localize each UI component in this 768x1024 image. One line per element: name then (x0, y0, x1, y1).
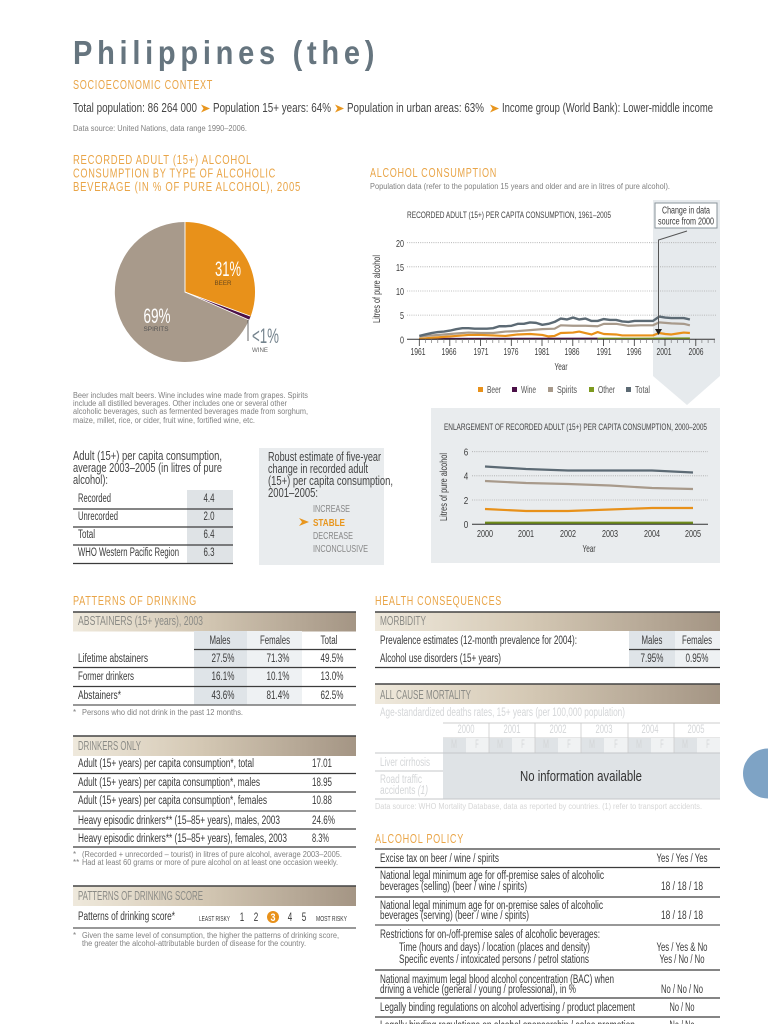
panel: abstainers table: 81.4% (266, 690, 290, 702)
per capita consumption intro (73, 449, 222, 487)
heading: recorded consumption by beverage: BEVERAGE (IN % OF PURE ALCOHOL), 2005 (73, 179, 301, 194)
panel: abstainers table: 13.0% (320, 671, 344, 683)
chart legend: Beer (487, 384, 501, 396)
pie chart (115, 222, 279, 362)
drinkers only footnotes: ** (73, 858, 79, 867)
drinkers only footnotes: Had at least 60 grams or more of pure alcohol on at least one occasion weekly. (82, 858, 338, 867)
panel: abstainers table: 43.6% (212, 690, 234, 702)
panel: drinkers only table: 24.6% (312, 815, 335, 827)
panel: all cause mortality: 2003 (596, 724, 612, 736)
panel: abstainers table: Males (210, 635, 231, 647)
panel: alcohol policy table: 18 / 18 / 18 (661, 881, 703, 893)
panel: enlargement chart 2000-2005: 2004 (644, 528, 660, 540)
panel: enlargement chart 2000-2005: 2 (464, 495, 468, 507)
heading: recorded consumption by beverage: CONSUMPTION BY TYPE OF ALCOHOLIC (73, 166, 276, 180)
beverage definitions note: alcoholic beverages, such as fermented beverages made from sorghum, (73, 407, 308, 416)
panel: abstainers table: 27.5% (212, 653, 234, 665)
line chart: consumption 1961-2005: Litres of pure alcohol (372, 255, 383, 323)
panel: abstainers table: ABSTAINERS (15+ years), 2003 (78, 614, 203, 628)
score footnote (73, 931, 339, 948)
per capita consumption table: Total (78, 529, 95, 541)
line chart: consumption 1961-2005: 1981 (534, 346, 550, 358)
socioeconomic indicators line: Total population: 86 264 000 (73, 101, 197, 115)
panel: alcohol policy table: Yes / No / No (660, 954, 704, 966)
panel: alcohol policy table (375, 849, 720, 1024)
panel: all cause mortality: F (521, 739, 525, 751)
panel: patterns of drinking score: Patterns of drinking score* (78, 911, 175, 923)
chart legend: Other (598, 384, 615, 396)
panel: alcohol policy table: Yes / Yes / Yes (656, 853, 708, 865)
panel: patterns of drinking score: PATTERNS OF DRINKING SCORE (78, 889, 203, 903)
panel: all cause mortality: 2000 (458, 724, 474, 736)
pie chart: 31% (215, 258, 241, 281)
per capita consumption table: 6.3 (204, 547, 214, 559)
per capita consumption table: 4.4 (204, 493, 215, 505)
panel: all cause mortality: 2004 (642, 724, 659, 736)
line chart: consumption 1961-2005: 1966 (442, 346, 457, 358)
panel: abstainers table (73, 612, 356, 705)
panel: alcohol policy table: National maximum legal blood alcohol concentration (BAC) when (380, 974, 614, 986)
panel: drinkers only table: Adult (15+ years) per capita consumption*, total (78, 758, 254, 770)
beverage definitions note: maize, millet, rice, or cider, fruit wine, fortified wine, etc. (73, 416, 255, 425)
panel: alcohol policy table: Specific events / intoxicated persons / petrol stations (399, 954, 589, 966)
panel: five-year change estimate: (15+) per capita consumption, (268, 474, 393, 488)
panel: drinkers only table: Adult (15+ years) per capita consumption*, males (78, 777, 260, 789)
per capita consumption table (73, 490, 233, 564)
panel: five-year change estimate: INCREASE (313, 503, 350, 515)
panel: patterns of drinking score: LEAST RISKY (199, 914, 230, 923)
drinkers only footnotes: * (73, 850, 76, 859)
line chart: consumption 1961-2005: Year (554, 361, 568, 373)
per capita consumption intro: average 2003–2005 (in litres of pure (73, 461, 222, 475)
per capita consumption intro: alcohol): (73, 473, 108, 487)
line chart: consumption 1961-2005: 15 (396, 262, 404, 274)
line chart: consumption 1961-2005: RECORDED ADULT (15+) PER CAPITA CONSUMPTION, 1961–2005 (407, 210, 611, 221)
panel: drinkers only table: Heavy episodic drinkers** (15–85+ years), females, 2003 (78, 833, 287, 845)
line chart: consumption 1961-2005: 1986 (564, 346, 580, 358)
panel: alcohol policy table: beverages (selling) (beer / wine / spirits) (380, 881, 527, 893)
panel: all cause mortality: No information available (520, 768, 642, 785)
heading: patterns of drinking: PATTERNS OF DRINKING (73, 593, 197, 608)
panel: drinkers only table: 8.3% (312, 833, 329, 845)
panel: all cause mortality: F (706, 739, 710, 751)
pie chart: SPIRITS (144, 326, 169, 333)
line chart: consumption 1961-2005: 1971 (474, 346, 489, 358)
line chart: consumption 1961-2005: 2006 (688, 346, 704, 358)
heading: alcohol policy: ALCOHOL POLICY (375, 831, 464, 846)
panel: abstainers table: Females (260, 635, 290, 647)
panel: enlargement chart 2000-2005: 2003 (602, 528, 618, 540)
score footnote: Given the same level of consumption, the higher the patterns of drinking score, (82, 931, 339, 940)
panel: drinkers only table (73, 736, 356, 847)
line chart: consumption 1961-2005: 0 (400, 334, 404, 346)
panel: abstainers table: 10.1% (266, 671, 290, 683)
pie chart: 69% (144, 305, 170, 328)
score footnote: * (73, 931, 76, 940)
per capita consumption table: 6.4 (204, 529, 215, 541)
panel: enlargement chart 2000-2005: 4 (464, 470, 468, 482)
panel: morbidity table: Females (682, 635, 712, 647)
panel: abstainers table: 62.5% (320, 690, 344, 702)
panel: alcohol policy table: beverages (serving) (beer / wine / spirits) (380, 910, 529, 922)
panel: all cause mortality: 2002 (550, 724, 566, 736)
panel: alcohol policy table: driving a vehicle (general / young / professional), in % (380, 984, 576, 996)
panel: abstainers table: 49.5% (320, 653, 344, 665)
panel: enlargement chart 2000-2005: 2001 (518, 528, 534, 540)
icon: blue page tab (743, 748, 768, 798)
panel: drinkers only table: Heavy episodic drinkers** (15–85+ years), males, 2003 (78, 815, 280, 827)
panel: all cause mortality: accidents (1) (380, 785, 428, 797)
panel: all cause mortality: F (567, 739, 571, 751)
panel: alcohol policy table: Legally binding regulations on alcohol advertising / product placement (380, 1002, 636, 1014)
panel: patterns of drinking score: 2 (254, 910, 258, 924)
panel: drinkers only table: 17.01 (312, 758, 332, 770)
population data note: Population data (refer to the population 15 years and older and are in litres of pure alcohol). (370, 182, 670, 191)
icon: score marker (267, 911, 279, 923)
callout: change in data source: Change in data (662, 206, 710, 216)
pie chart: WINE (252, 347, 269, 354)
pie chart: BEER (214, 280, 232, 287)
panel: five-year change estimate: DECREASE (313, 530, 353, 542)
panel: enlargement chart 2000-2005: 0 (464, 519, 468, 531)
panel: enlargement chart 2000-2005: 2005 (685, 528, 701, 540)
panel: all cause mortality: M (497, 739, 503, 751)
panel: five-year change estimate: 2001–2005: (268, 486, 318, 500)
panel: all cause mortality: Road traffic (380, 774, 422, 786)
panel: five-year change estimate: STABLE (313, 517, 345, 529)
panel: enlargement chart 2000-2005: 2002 (560, 528, 576, 540)
panel: all cause mortality: M (636, 739, 642, 751)
panel: all cause mortality: Age-standardized deaths rates, 15+ years (per 100,000 population) (380, 707, 625, 719)
panel: five-year change estimate: Robust estimate of five-year (268, 450, 381, 464)
panel: all cause mortality: Data source: WHO Mortality Database, data as reported by countries. (1) refer to transport accidents. (375, 802, 702, 811)
socioeconomic indicators line (73, 101, 713, 115)
line chart: consumption 1961-2005: 1991 (596, 346, 612, 358)
panel: all cause mortality: Liver cirrhosis (380, 757, 430, 769)
panel: five-year change estimate: change in recorded adult (268, 462, 368, 476)
panel: alcohol policy table: No / No (670, 1002, 694, 1014)
panel: all cause mortality: M (451, 739, 457, 751)
panel: abstainers table: Abstainers* (78, 690, 121, 702)
per capita consumption table: 2.0 (204, 511, 214, 523)
panel: all cause mortality: 2005 (688, 724, 704, 736)
heading: health consequences: HEALTH CONSEQUENCES (375, 593, 502, 608)
drinkers only footnotes (73, 850, 342, 867)
panel: all cause mortality: F (475, 739, 479, 751)
title: Philippines (the) (73, 34, 379, 71)
panel: drinkers only table: 18.95 (312, 777, 332, 789)
data source note: Data source: United Nations, data range 1990–2006. (73, 124, 247, 133)
panel: morbidity table (375, 612, 720, 668)
panel: morbidity table: 7.95% (640, 653, 664, 665)
panel: all cause mortality: M (589, 739, 595, 751)
panel: patterns of drinking score (73, 886, 356, 928)
line chart: consumption 1961-2005 (372, 210, 716, 373)
chart legend: Wine (521, 384, 536, 396)
chart legend (478, 384, 650, 396)
pie chart: <1% (252, 325, 279, 348)
line chart: consumption 1961-2005: 5 (400, 310, 404, 322)
abstainers footnote: Persons who did not drink in the past 12 months. (82, 708, 243, 717)
panel: morbidity table: Males (642, 635, 663, 647)
line chart: consumption 1961-2005: 2001 (656, 346, 672, 358)
panel: alcohol policy table: Excise tax on beer / wine / spirits (380, 853, 499, 865)
abstainers footnote: * (73, 708, 76, 717)
panel: five-year change estimate (259, 448, 393, 565)
panel: alcohol policy table: National legal minimum age for on-premise sales of alcoholic (380, 900, 603, 912)
panel: abstainers table: Lifetime abstainers (78, 653, 148, 665)
panel: enlargement chart 2000-2005: 2000 (477, 528, 493, 540)
per capita consumption table: Unrecorded (78, 511, 118, 523)
panel: alcohol policy table: Restrictions for on-/off-premise sales of alcoholic beverages: (380, 929, 600, 941)
heading: alcohol consumption: ALCOHOL CONSUMPTION (370, 165, 497, 180)
panel: abstainers table: Former drinkers (78, 671, 134, 683)
chart legend: Spirits (557, 384, 577, 396)
beverage definitions note: Beer includes malt beers. Wine includes wine made from grapes. Spirits (73, 391, 308, 400)
panel: morbidity table: Prevalence estimates (12-month prevalence for 2004): (380, 635, 577, 647)
callout: change in data source (655, 203, 717, 335)
panel: patterns of drinking score: 3 (270, 912, 276, 924)
panel: morbidity table: Alcohol use disorders (15+ years) (380, 653, 501, 665)
panel: enlargement chart 2000-2005 (431, 408, 720, 563)
panel: all cause mortality: F (660, 739, 664, 751)
callout: change in data source: source from 2000 (658, 216, 714, 228)
drinkers only footnotes: (Recorded + unrecorded – tourist) in litres of pure alcohol, average 2003–2005. (82, 850, 342, 859)
panel: all cause mortality (375, 684, 720, 811)
beverage definitions note: include all distilled beverages. Other includes one or several other (73, 399, 287, 408)
panel: patterns of drinking score: 5 (302, 910, 306, 924)
panel: alcohol policy table: Yes / Yes & No (656, 942, 708, 954)
beverage definitions note (73, 391, 308, 425)
panel: enlargement chart 2000-2005: Litres of pure alcohol (439, 453, 450, 521)
heading: recorded consumption by beverage (73, 152, 301, 194)
panel: drinkers only table: Adult (15+ years) per capita consumption*, females (78, 795, 267, 807)
panel: alcohol policy table: Time (hours and days) / location (places and density) (399, 942, 590, 954)
panel: all cause mortality: M (682, 739, 688, 751)
panel: morbidity table: MORBIDITY (380, 614, 426, 628)
panel: all cause mortality: 2001 (504, 724, 520, 736)
panel: patterns of drinking score: MOST RISKY (316, 914, 347, 923)
heading: socioeconomic context: SOCIOECONOMIC CONTEXT (73, 77, 213, 92)
socioeconomic indicators line: Population in urban areas: 63% (347, 101, 484, 115)
panel: all cause mortality: F (614, 739, 618, 751)
line chart: consumption 1961-2005: 1961 (410, 346, 426, 358)
line chart: consumption 1961-2005: 10 (396, 286, 404, 298)
panel: patterns of drinking score: 4 (288, 910, 292, 924)
score footnote: the greater the alcohol-attributable burden of disease for the country. (82, 939, 306, 948)
per capita consumption table: Recorded (78, 493, 111, 505)
panel: five-year change estimate: INCONCLUSIVE (313, 543, 368, 555)
line chart: consumption 1961-2005: 1976 (504, 346, 519, 358)
panel: drinkers only table: DRINKERS ONLY (78, 739, 141, 753)
line chart: consumption 1961-2005: 1996 (626, 346, 642, 358)
per capita consumption table: WHO Western Pacific Region (78, 547, 179, 559)
panel: all cause mortality: ALL CAUSE MORTALITY (380, 688, 471, 702)
panel: alcohol policy table: No / No / No (661, 984, 703, 996)
panel: drinkers only table: 10.88 (312, 795, 332, 807)
panel: alcohol policy table: National legal minimum age for off-premise sales of alcoholic (380, 870, 604, 882)
panel: all cause mortality: M (543, 739, 549, 751)
panel: abstainers table: 71.3% (266, 653, 290, 665)
panel: enlargement chart 2000-2005: Year (582, 543, 596, 555)
panel: alcohol policy table: 18 / 18 / 18 (661, 910, 703, 922)
panel: abstainers table: Total (320, 635, 338, 647)
panel: patterns of drinking score: 1 (240, 910, 244, 924)
panel: enlargement chart 2000-2005: 6 (464, 446, 468, 458)
heading: recorded consumption by beverage: RECORDED ADULT (15+) ALCOHOL (73, 152, 252, 167)
panel: data source change arrow (653, 200, 720, 405)
panel: morbidity table: 0.95% (686, 653, 708, 665)
panel: abstainers table: 16.1% (212, 671, 234, 683)
line chart: consumption 1961-2005: 20 (396, 238, 404, 250)
per capita consumption intro: Adult (15+) per capita consumption, (73, 449, 222, 463)
chart legend: Total (635, 384, 650, 396)
socioeconomic indicators line: Population 15+ years: 64% (213, 101, 331, 115)
